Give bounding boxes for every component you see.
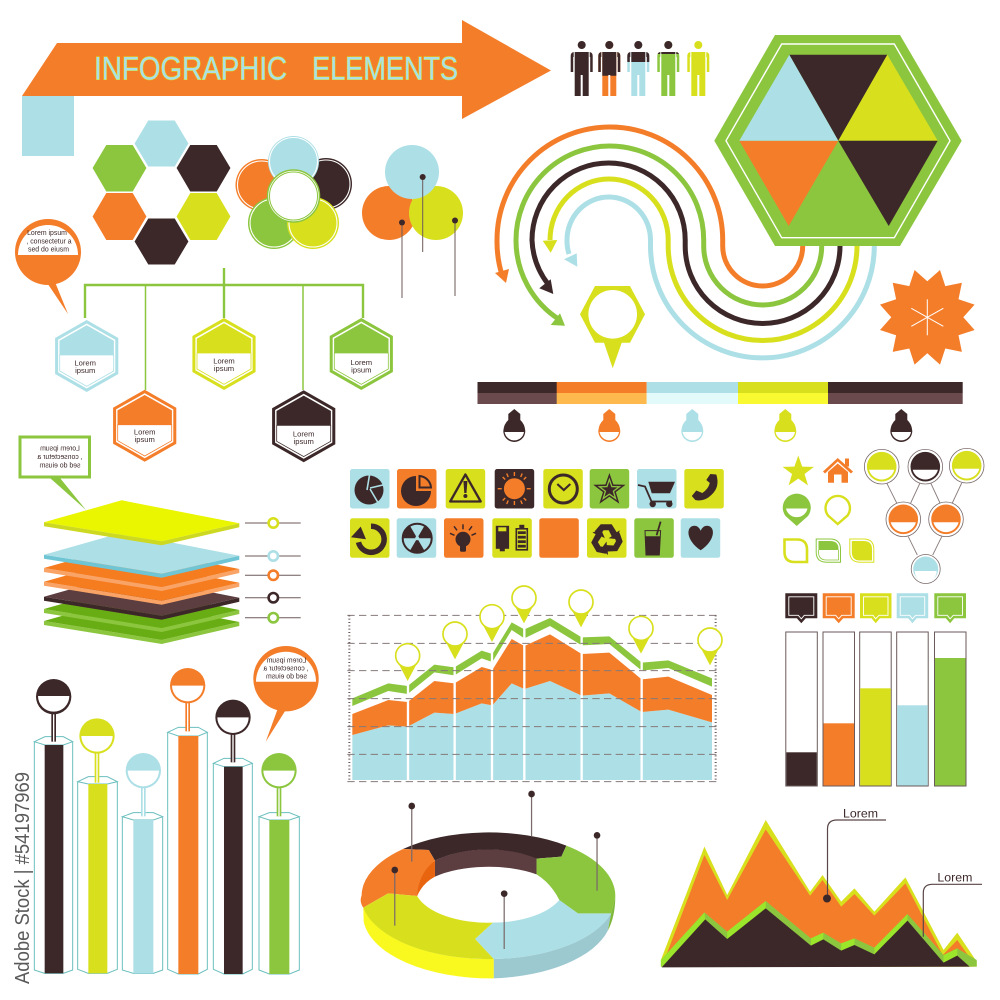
title: ELEMENTS — [312, 50, 458, 86]
title — [94, 50, 458, 86]
blue area — [352, 681, 712, 780]
speech bubble: mirrored orange: Lorem ipsum — [266, 658, 306, 664]
leader 2: Lorem — [937, 872, 972, 884]
tree node: light blue hexagon — [55, 320, 118, 392]
icon: lime leaf filled — [850, 539, 874, 562]
small callout tags — [785, 593, 966, 623]
tree node: dark hexagon: ipsum — [294, 437, 314, 446]
icon: shopping cart — [637, 469, 676, 508]
hexagon ring — [92, 120, 231, 265]
icon: drink glass — [634, 518, 674, 558]
speech bubble: orange circle: sed do eiusm — [28, 246, 69, 254]
tree node: light blue hexagon: ipsum — [75, 366, 95, 375]
big hexagon with triangles — [714, 35, 962, 246]
people icons — [571, 41, 709, 96]
orange starburst badge — [880, 270, 975, 365]
donut segment: green — [537, 846, 615, 913]
speech bubble: mirrored orange: sed do eiusm — [266, 674, 307, 681]
small icons: star, house, pins, leaves — [783, 456, 874, 562]
green band — [352, 618, 712, 706]
green callout box: Lorem ipsum — [40, 446, 80, 452]
icon: batteries — [492, 518, 532, 558]
icon: sun — [495, 469, 534, 508]
icon: clock — [543, 469, 583, 508]
speech bubble: mirrored orange — [253, 646, 319, 742]
column 2 — [78, 777, 117, 973]
icon: phone — [684, 469, 724, 508]
icon: radiation — [397, 518, 436, 558]
dark mountain — [662, 908, 970, 967]
tree node: dark hexagon: Lorem — [293, 429, 314, 438]
icon: blank orange tile — [539, 518, 579, 558]
speech bubble: orange circle: , consectetur a — [26, 238, 72, 245]
icon: light bulb — [444, 518, 484, 558]
leader 1: Lorem — [843, 808, 878, 820]
green callout box: , consectetur a — [37, 454, 83, 461]
donut segment: lime — [363, 893, 494, 959]
overlapping circles — [236, 136, 352, 249]
icon: green pin — [783, 494, 811, 526]
leader 1 — [823, 808, 886, 902]
tree node: green hexagon — [330, 318, 393, 390]
icon: warning triangle — [446, 469, 485, 508]
column 6 — [259, 813, 299, 974]
icon: heart — [681, 518, 720, 558]
donut pins — [395, 794, 597, 949]
green callout box: sed do eiusm — [39, 462, 80, 469]
column 5 — [213, 758, 252, 974]
icon: green leaf half — [816, 539, 840, 562]
column 3 — [122, 813, 163, 973]
icon: star — [590, 469, 629, 508]
icon: lime outline pin — [826, 496, 850, 524]
bulb markers — [503, 409, 912, 442]
tree node: lime hexagon — [192, 318, 256, 390]
area chart — [347, 586, 722, 782]
icon: lime leaf outline — [784, 540, 807, 562]
tree node: orange hexagon: ipsum — [135, 435, 155, 444]
grid lines — [347, 615, 717, 782]
stock id label: Adobe Stock | #54197969 — [12, 772, 34, 984]
icon: house — [823, 458, 853, 483]
axis ticks — [349, 615, 716, 782]
donut segment: orange — [361, 849, 435, 908]
orange area — [352, 634, 712, 735]
donut segment: dark — [403, 832, 566, 861]
stacked layers — [44, 500, 239, 644]
white column gaps — [408, 620, 642, 781]
column markers — [36, 668, 297, 816]
curved arrows — [495, 127, 874, 358]
column 1 — [34, 737, 73, 973]
leader 2 — [923, 872, 982, 937]
green ridge — [661, 901, 977, 967]
tree node: orange hexagon: Lorem — [134, 428, 155, 437]
vertical level bars — [786, 632, 966, 786]
title: INFOGRAPHIC — [94, 50, 287, 86]
orange mountain — [664, 829, 974, 967]
circle network diagram — [864, 448, 984, 584]
donut inner walls — [415, 849, 537, 896]
donut segment: blue — [475, 900, 611, 959]
tree node: green hexagon: ipsum — [351, 366, 371, 374]
mountain area chart — [661, 808, 982, 967]
tree node: orange hexagon — [113, 390, 176, 462]
green callout box — [20, 437, 90, 510]
speech bubble: mirrored orange: , consectetur a — [263, 666, 309, 673]
pinned circles — [362, 145, 463, 298]
lime hexagon map pin — [580, 286, 645, 368]
icon: lime star — [783, 456, 814, 485]
icon: pie chart — [350, 469, 390, 508]
speech bubble: orange circle — [15, 219, 81, 314]
bright green facets — [661, 901, 957, 967]
org tree connectors — [85, 268, 363, 390]
hexagonal column chart — [34, 668, 299, 974]
title arrow banner — [22, 20, 551, 156]
tree node: lime hexagon: Lorem — [213, 356, 235, 366]
icon: circular arrow — [350, 518, 390, 558]
column 4 — [168, 727, 207, 974]
icon grid — [350, 469, 724, 558]
3D donut chart — [361, 791, 615, 978]
segmented horizontal bar — [478, 382, 963, 404]
donut side walls — [363, 897, 615, 978]
layer sliders — [245, 518, 301, 622]
tree node: lime hexagon: ipsum — [214, 364, 234, 373]
tree node: dark hexagon — [272, 390, 335, 462]
lime chart pins — [396, 586, 722, 681]
lime mountain outline — [661, 820, 977, 967]
icon: pie chart quarter — [397, 469, 436, 508]
tree node: light blue hexagon: Lorem — [74, 358, 96, 368]
speech bubble: orange circle: Lorem ipsum — [27, 230, 67, 237]
tree node: green hexagon: Lorem — [351, 358, 372, 367]
icon: recycle — [587, 518, 626, 558]
